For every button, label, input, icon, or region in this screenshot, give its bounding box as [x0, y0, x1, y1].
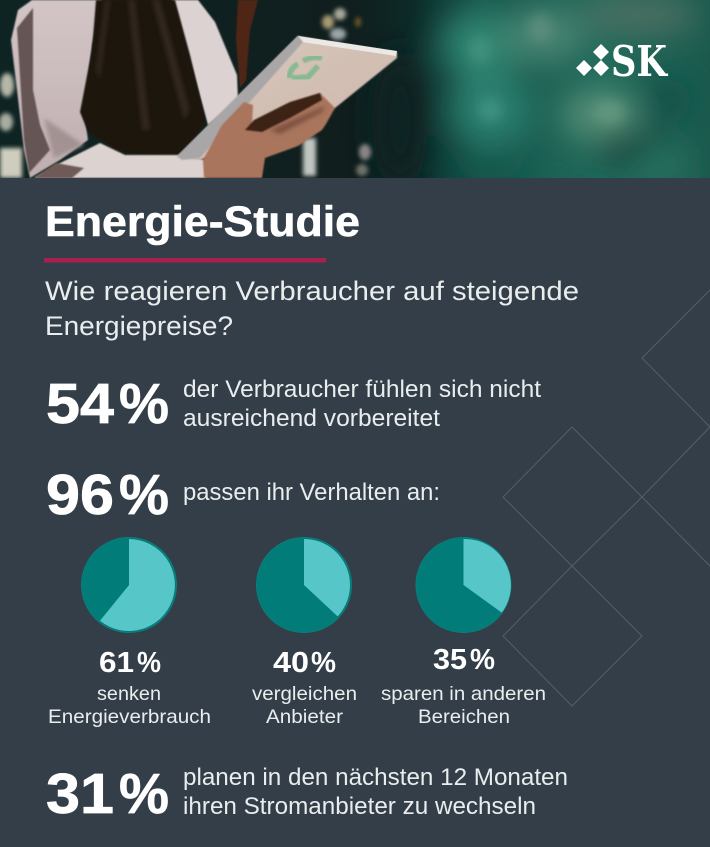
- statistic: 96 %: [46, 463, 440, 527]
- statistic: 54 %: [46, 372, 541, 436]
- pie chart: 40 % vergleichen Anbieter: vergleichen: [252, 683, 357, 705]
- photo: woman holding a tablet: [0, 0, 710, 190]
- pie chart: 35 % sparen in anderen Bereichen: [381, 538, 546, 728]
- background diamonds: [503, 290, 710, 706]
- pie chart: 40 % vergleichen Anbieter: %: [311, 647, 336, 679]
- subtitle: Energiepreise?: [45, 311, 233, 341]
- logo: [576, 44, 668, 76]
- subtitle: [45, 276, 579, 341]
- statistic: 31 %: 31: [46, 762, 114, 826]
- statistic: 54 %: der Verbraucher fühlen sich nicht: [183, 376, 541, 403]
- pie chart: 40 % vergleichen Anbieter: 40: [273, 647, 309, 679]
- reddish hair strand: [236, 0, 258, 88]
- statistic: 31 %: ihren Stromanbieter zu wechseln: [183, 793, 536, 820]
- statistic: 96 %: passen ihr Verhalten an:: [183, 479, 440, 506]
- hair: [80, 0, 206, 158]
- subtitle: Wie reagieren Verbraucher auf steigende: [45, 276, 579, 306]
- pie chart: 40 % vergleichen Anbieter: [252, 538, 357, 728]
- statistic: 96 %: %: [119, 463, 169, 527]
- pie chart: 61 % senken Energieverbrauch: Energieverbrauch: [48, 706, 211, 728]
- shirt left side: [11, 0, 102, 178]
- statistic: 54 %: 54: [46, 372, 114, 436]
- pie chart: 61 % senken Energieverbrauch: 61: [99, 647, 134, 679]
- recycle symbol on tablet: [289, 57, 322, 78]
- statistic: 31 %: [46, 762, 568, 826]
- pie chart: 61 % senken Energieverbrauch: %: [137, 647, 161, 679]
- pie chart: 35 % sparen in anderen Bereichen: 35: [433, 644, 467, 676]
- statistic: 96 %: 96: [46, 463, 114, 527]
- pie chart: 35 % sparen in anderen Bereichen: sparen in anderen: [381, 683, 546, 705]
- tablet: [177, 36, 397, 160]
- pie chart: 35 % sparen in anderen Bereichen: %: [470, 644, 495, 676]
- statistic: 54 %: ausreichend vorbereitet: [183, 405, 440, 432]
- title underline: [44, 258, 326, 262]
- title: Energie-Studie: [45, 198, 360, 246]
- pie chart: 35 % sparen in anderen Bereichen: Bereichen: [418, 706, 510, 728]
- logo: SK: [611, 37, 668, 86]
- pie chart: 61 % senken Energieverbrauch: [48, 538, 211, 728]
- statistic: 31 %: %: [119, 762, 169, 826]
- pie chart: 40 % vergleichen Anbieter: Anbieter: [266, 706, 344, 728]
- statistic: 31 %: planen in den nächsten 12 Monaten: [183, 764, 568, 791]
- statistic: 54 %: %: [119, 372, 169, 436]
- sleeve cuff: [34, 143, 206, 178]
- pie chart: 61 % senken Energieverbrauch: senken: [97, 683, 161, 705]
- shirt right side: [172, 0, 238, 125]
- hand: [203, 93, 335, 178]
- green bokeh background: [408, 0, 704, 178]
- background blossoms: [0, 8, 371, 178]
